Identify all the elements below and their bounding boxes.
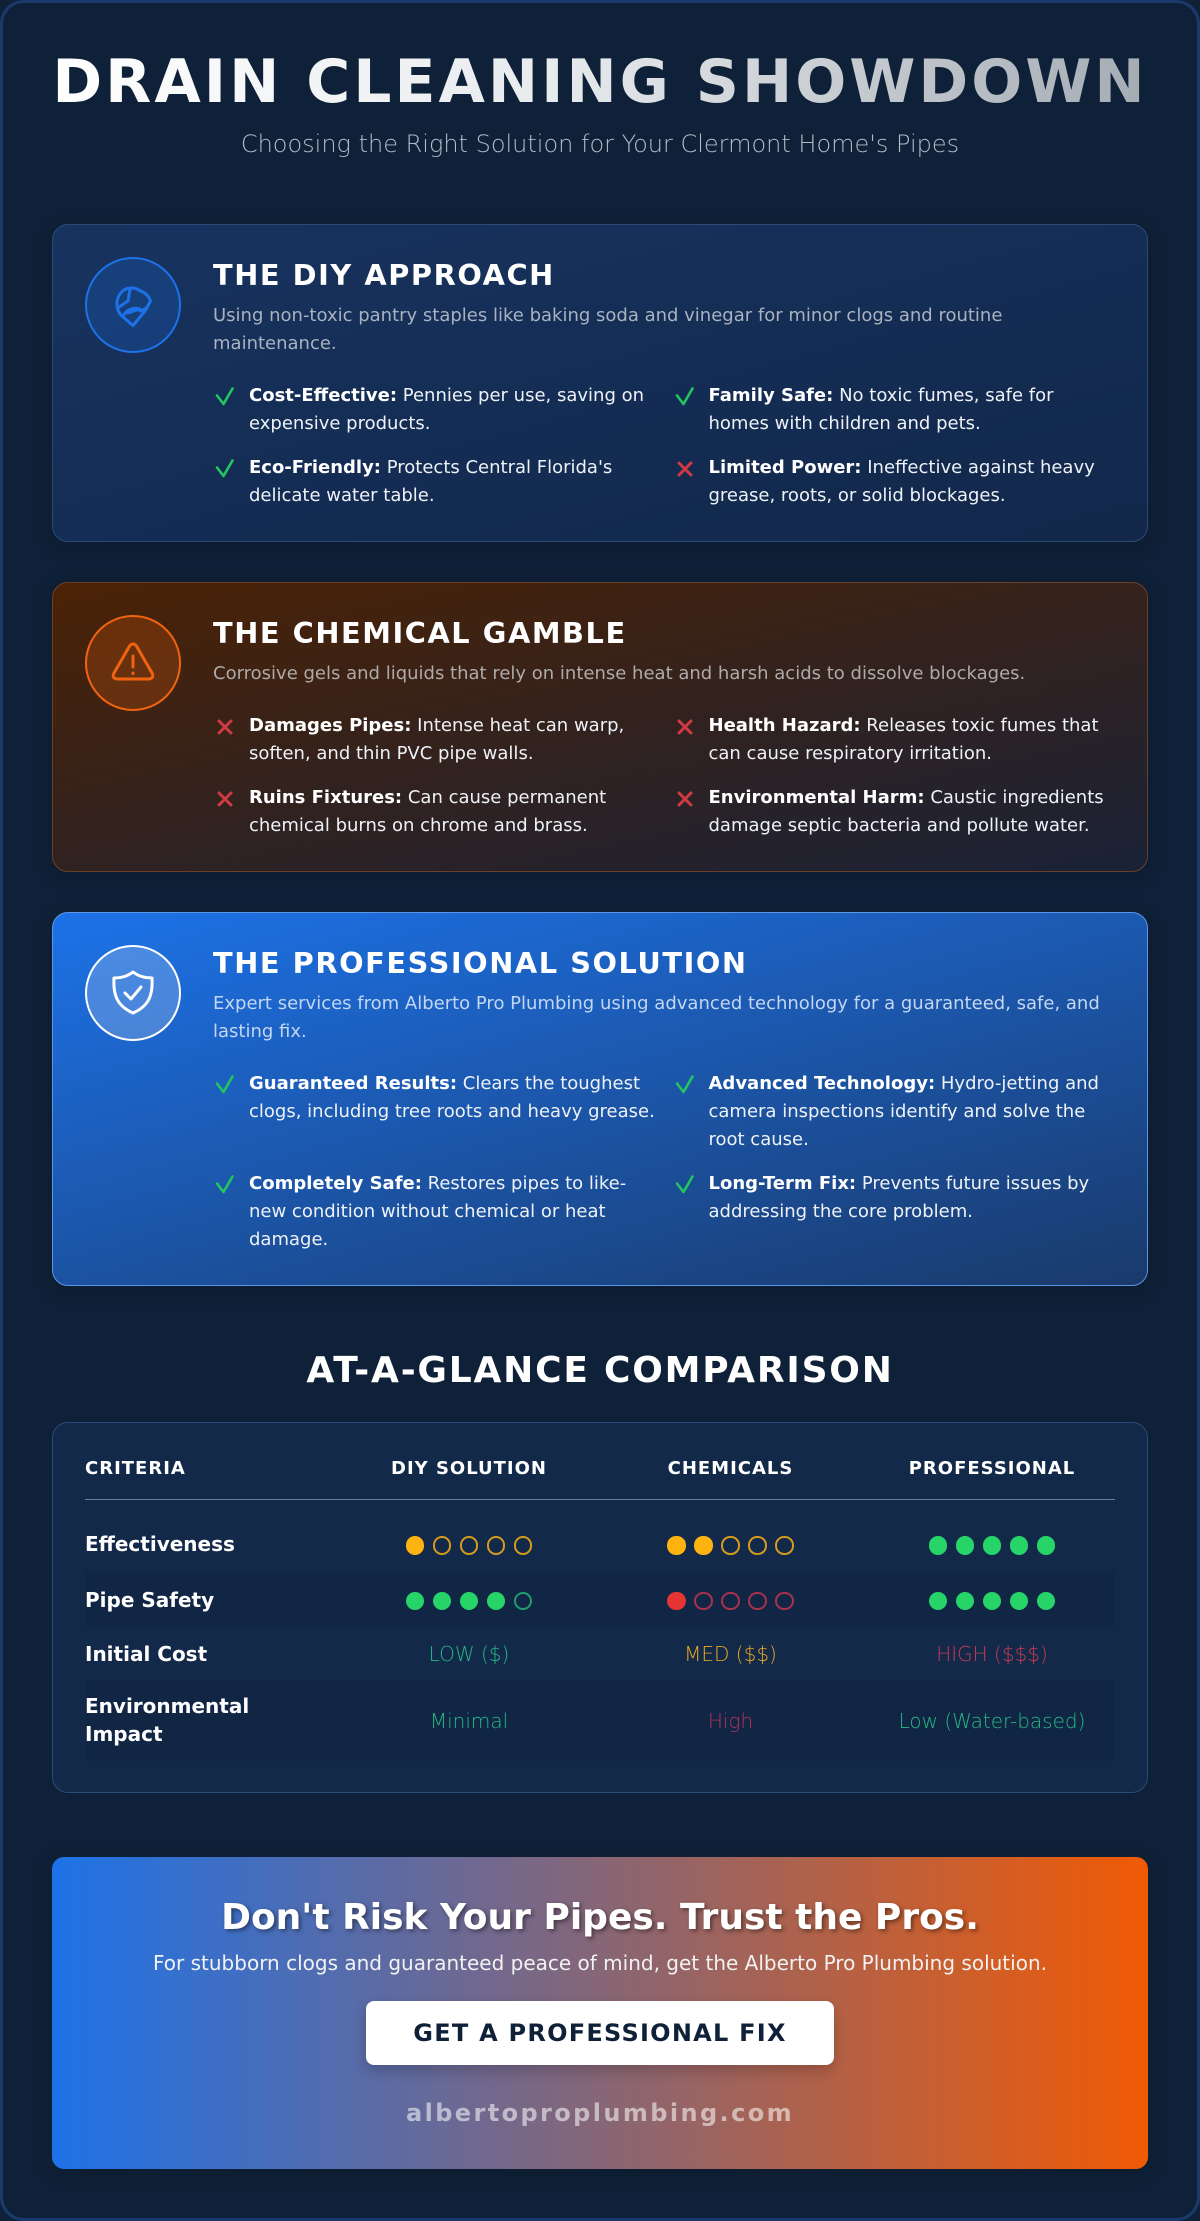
item: long-term fix: Long-Term Fix: Prevents future issues by addressing the core problem. (708, 1173, 1089, 1222)
row: pipe safety: Pipe Safety (85, 1588, 214, 1612)
DIY text content (213, 258, 1095, 506)
item: advanced technology: Advanced Technology: Hydro-jetting and camera inspections identify and solve the root cause. (708, 1073, 1099, 1150)
table header row: CRITERIA (85, 1458, 186, 1478)
row: initial cost: Initial Cost (85, 1642, 207, 1666)
list of benefits (216, 1073, 1099, 1250)
heading: THE CHEMICAL GAMBLE (213, 616, 627, 650)
panel: professional solution (52, 912, 1148, 1286)
row: environmental impact: High (708, 1708, 753, 1732)
description: Expert services from Alberto Pro Plumbing using advanced technology for a guaranteed, safe, and lasting fix. (213, 993, 1100, 1042)
row: environmental impact: Low (Water-based) (899, 1708, 1085, 1732)
panel: comparison table (52, 1422, 1148, 1793)
row: pipe safety (85, 1572, 1115, 1627)
item: limited power: Limited Power: Ineffective against heavy grease, roots, or solid blockages. (708, 457, 1095, 506)
professional text content (213, 946, 1100, 1250)
item: damages pipes: Damages Pipes: Intense heat can warp, soften, and thin PVC pipe walls. (249, 715, 624, 764)
row: initial cost (85, 1642, 1048, 1666)
description: Using non-toxic pantry staples like baking soda and vinegar for minor clogs and routine maintenance. (213, 305, 1002, 354)
table header row: CHEMICALS (668, 1458, 793, 1479)
row: initial cost: HIGH ($$$) (936, 1642, 1048, 1666)
row: effectiveness (85, 1532, 1055, 1556)
chemical text content (213, 616, 1104, 836)
list of hazards (217, 715, 1104, 836)
item: environmental harm: Environmental Harm: Caustic ingredients damage septic bacteria and pollute water. (708, 787, 1104, 836)
item: health hazard: Health Hazard: Releases toxic fumes that can cause respiratory irritation. (708, 715, 1099, 764)
row: initial cost: MED ($$) (684, 1642, 777, 1666)
item: ruins fixtures: Ruins Fixtures: Can cause permanent chemical burns on chrome and brass. (249, 787, 606, 836)
row: initial cost: LOW ($) (429, 1642, 509, 1666)
icon: DIY drop (85, 257, 181, 353)
icon: shield with check (85, 945, 181, 1041)
title: DRAIN CLEANING SHOWDOWN (52, 47, 1148, 117)
item: completely safe: Completely Safe: Restores pipes to like-new condition without chemical or heat damage. (249, 1173, 626, 1250)
call to action banner (52, 1857, 1148, 2169)
table header row: DIY SOLUTION (391, 1458, 547, 1479)
row: environmental impact: Environmental (85, 1694, 249, 1718)
item: guaranteed results: clogs, including tree roots and heavy grease. (249, 1101, 655, 1122)
table header row: PROFESSIONAL (909, 1458, 1075, 1479)
panel: DIY approach (52, 224, 1148, 542)
item: eco-friendly: Eco-Friendly: Protects Central Florida's delicate water table. (249, 457, 612, 506)
table header row (85, 1436, 1115, 1500)
row: environmental impact: Minimal (430, 1708, 508, 1732)
subtitle: Choosing the Right Solution for Your Clermont Home's Pipes (241, 130, 959, 158)
heading: comparison: AT-A-GLANCE COMPARISON (306, 1350, 894, 1391)
row: effectiveness: Effectiveness (85, 1532, 235, 1556)
CTA text: For stubborn clogs and guaranteed peace of mind, get the Alberto Pro Plumbing solution. (153, 1951, 1047, 1975)
CTA button: GET A PROFESSIONAL FIX (413, 2019, 787, 2047)
panel: chemical gamble (52, 582, 1148, 872)
icon: warning triangle (85, 615, 181, 711)
item: cost-effective: Cost-Effective: Pennies per use, saving on expensive products. (249, 385, 644, 434)
row: environmental impact (85, 1680, 1115, 1761)
description: Corrosive gels and liquids that rely on intense heat and harsh acids to dissolve blockages. (213, 663, 1025, 684)
list of pros and cons (216, 385, 1095, 506)
heading: THE DIY APPROACH (213, 258, 555, 292)
item: family safe: Family Safe: No toxic fumes, safe for homes with children and pets. (708, 385, 1054, 434)
CTA button (366, 2001, 834, 2065)
row: environmental impact: Impact (85, 1722, 163, 1746)
website URL: albertoproplumbing.com (406, 2099, 794, 2127)
heading: THE PROFESSIONAL SOLUTION (213, 946, 748, 980)
item: guaranteed results (216, 1073, 655, 1122)
CTA heading: Don't Risk Your Pipes. Trust the Pros. (221, 1897, 979, 1938)
item: guaranteed results: Guaranteed Results: Clears the toughest (249, 1073, 640, 1094)
